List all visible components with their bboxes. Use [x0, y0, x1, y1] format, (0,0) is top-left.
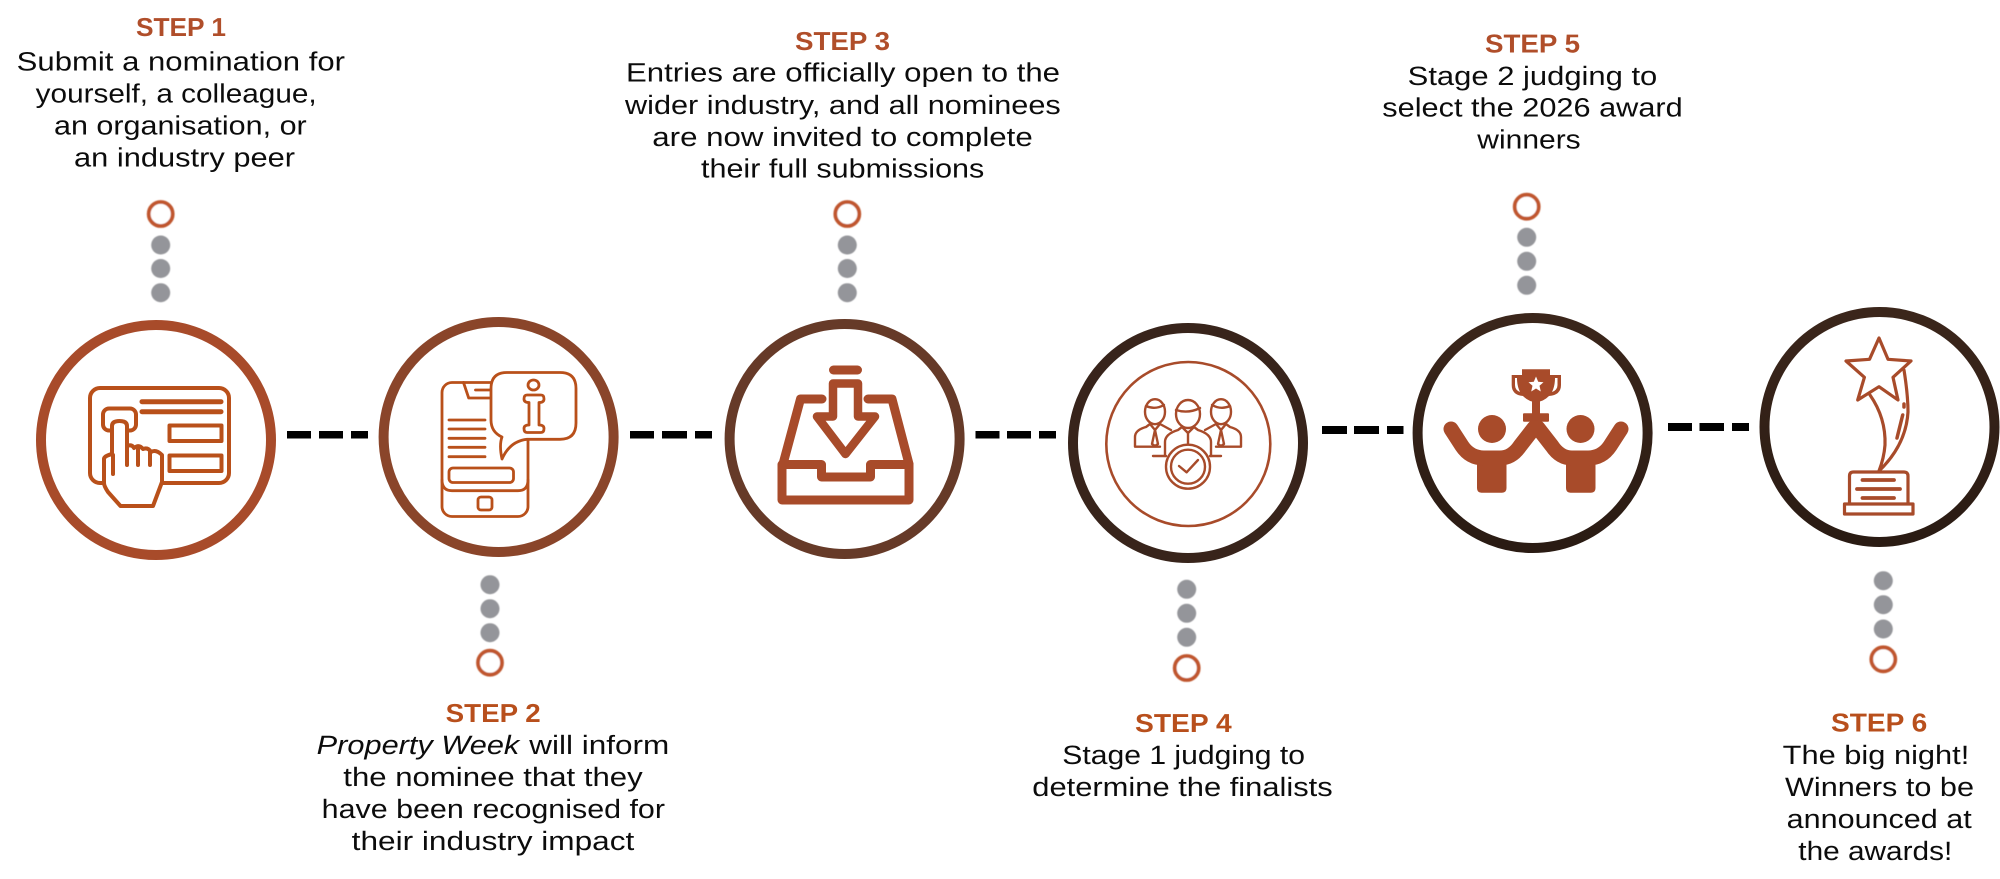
step 5 description: winners	[1476, 125, 1581, 155]
step 6 circle with icon	[1764, 312, 1994, 542]
connector: dashes step 3 to step 4	[976, 431, 1056, 438]
step 2 description: have been recognised for	[322, 794, 665, 824]
step 1 dotted connector	[149, 202, 173, 302]
step 4 dotted connector	[1175, 580, 1199, 680]
step 1 description: yourself, a colleague,	[36, 79, 317, 109]
step 2 heading: STEP 2	[446, 698, 541, 728]
icon: judging panel with approval badge	[1106, 362, 1270, 526]
step 5 heading: STEP 5	[1485, 29, 1580, 59]
step 2 description	[317, 730, 669, 856]
step 3 description: are now invited to complete	[652, 122, 1033, 152]
step 4 description: Stage 1 judging to	[1062, 740, 1305, 770]
step 5 description: Stage 2 judging to	[1408, 61, 1657, 91]
step 6 text block	[1783, 707, 1974, 866]
step 5 description: select the 2026 award	[1382, 93, 1683, 123]
step 4 text block	[1032, 708, 1333, 802]
step 2 text block	[317, 698, 669, 856]
step 3 description: Entries are officially open to the	[626, 58, 1060, 88]
step 5 circle with icon	[1418, 318, 1648, 548]
step 6 description	[1783, 740, 1974, 866]
step 3 description: their full submissions	[701, 154, 984, 184]
icon: two people raising a trophy	[1451, 369, 1621, 493]
connector: dashes step 5 to step 6	[1668, 423, 1749, 431]
step 3 description	[624, 58, 1061, 184]
step 3 text block	[624, 26, 1061, 184]
step 4 description: determine the finalists	[1032, 772, 1333, 802]
step 1 circle with icon	[41, 325, 271, 555]
step 6 dotted connector	[1871, 571, 1895, 671]
step 6 heading: STEP 6	[1831, 707, 1927, 737]
step 6 description: the awards!	[1798, 836, 1952, 866]
connector: dashes step 2 to step 3	[630, 431, 712, 438]
step 3 heading: STEP 3	[795, 26, 890, 56]
step 1 heading: STEP 1	[136, 12, 226, 42]
icon: download arrow into tray	[782, 370, 909, 500]
step 2 dotted connector	[478, 575, 502, 675]
step 1 description	[17, 47, 345, 173]
step 4 heading: STEP 4	[1135, 708, 1232, 738]
step 2 description: Property Week	[317, 730, 521, 760]
icon: hand pressing form button	[90, 388, 229, 506]
step 6 description: Winners to be	[1785, 772, 1974, 802]
step 2 description: will inform	[528, 730, 669, 760]
connector: dashes step 4 to step 5	[1322, 426, 1404, 434]
step 3 description: wider industry, and all nominees	[624, 90, 1061, 120]
step 4 description	[1032, 740, 1333, 802]
step 2 description: their industry impact	[352, 826, 635, 856]
step 5 text block	[1382, 29, 1683, 155]
icon: phone with info speech bubble	[442, 372, 576, 516]
connector: dashes step 1 to step 2	[287, 431, 368, 438]
step 3 dotted connector	[835, 202, 859, 302]
step 1 text block	[17, 12, 345, 173]
step 2 circle with icon	[384, 322, 614, 552]
step 6 description: The big night!	[1783, 740, 1969, 770]
step 5 description	[1382, 61, 1683, 155]
icon: star award trophy	[1844, 338, 1913, 514]
step 5 dotted connector	[1515, 195, 1539, 295]
step 6 description: announced at	[1787, 804, 1972, 834]
step 2 description: the nominee that they	[343, 762, 644, 792]
step 3 circle with icon	[730, 324, 960, 554]
step 1 description: Submit a nomination for	[17, 47, 345, 77]
step 1 description: an industry peer	[74, 143, 295, 173]
step 4 circle with icon	[1073, 328, 1303, 558]
step 1 description: an organisation, or	[54, 110, 307, 140]
